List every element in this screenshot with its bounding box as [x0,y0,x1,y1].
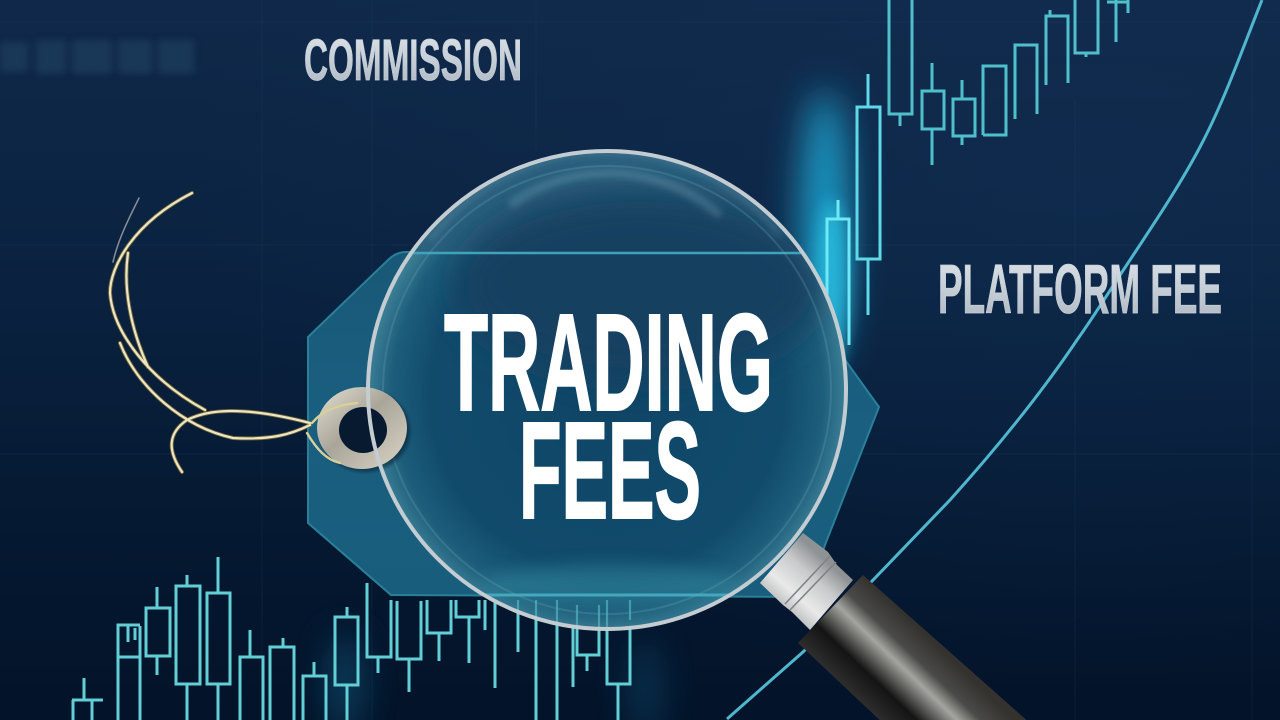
tag top edge seen through lens [400,252,805,254]
label: commission: COMMISSION [304,28,522,93]
price tag [308,252,879,597]
magnifying glass lens [360,140,860,632]
candlestick chart: upper right [827,0,1128,345]
growth curve line [727,0,1262,719]
tag string [110,193,310,472]
candles seen through lens [516,600,632,627]
glass top reflection [414,153,834,360]
lens rim [368,151,846,629]
title: trading fees: TRADING [444,286,773,440]
magnifying glass handle [760,533,1032,720]
title: trading fees: FEES [519,394,701,548]
blurred background label [0,40,194,74]
metal collar [760,533,853,630]
cyan glow behind rising candles [801,90,849,370]
title: trading fees [444,286,773,548]
metal eyelet [317,387,410,472]
glass lower reflection [480,565,740,605]
teal glow behind lower candles [331,635,659,720]
tag bottom edge seen through lens [486,594,728,596]
black grip [798,575,1032,720]
candlestick chart: lower left [72,557,630,720]
string loop through eyelet [307,403,357,463]
